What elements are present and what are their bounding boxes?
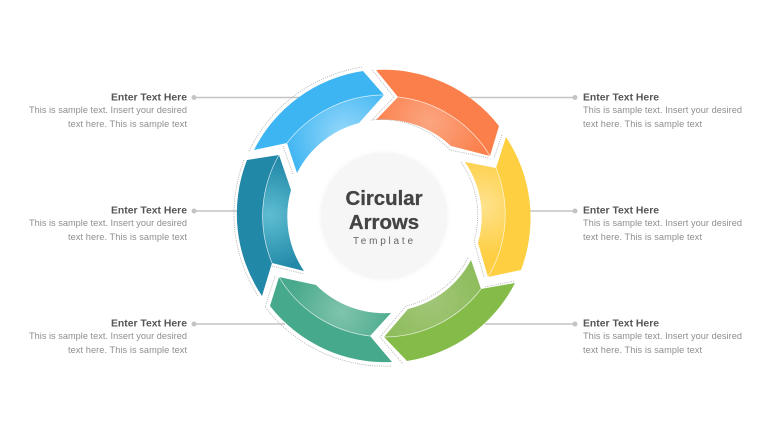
text block: top right: [583, 92, 742, 129]
center circle: [321, 153, 447, 279]
title: Circular: [345, 188, 423, 210]
arrow: green: [380, 258, 515, 364]
text block: middle right: This is sample text. Insert your desired: [583, 218, 742, 228]
text block: bottom right: text here. This is sample text: [583, 345, 702, 355]
connector lines: [192, 95, 578, 326]
arrow: teal green: [265, 276, 392, 366]
text block: middle left: Enter Text Here: [111, 206, 187, 216]
text block: top left: Enter Text Here: [111, 92, 187, 104]
center circle: Arrows: [349, 212, 419, 234]
arrow: dark teal: [234, 155, 304, 296]
text block: top left: [29, 92, 187, 129]
text block: bottom left: Enter Text Here: [111, 318, 187, 330]
text block: bottom left: text here. This is sample text: [68, 345, 187, 355]
text block: bottom left: [29, 318, 187, 355]
text block: middle right: Enter Text Here: [583, 206, 659, 216]
text block: bottom left: This is sample text. Insert your desired: [29, 331, 187, 341]
text block: top right: Enter Text Here: [583, 92, 659, 104]
text block: middle right: [583, 206, 742, 242]
text block: top right: text here. This is sample text: [583, 119, 702, 129]
text block: bottom right: Enter Text Here: [583, 318, 659, 330]
text block: top left: text here. This is sample text: [68, 119, 187, 129]
text block: middle left: [29, 206, 187, 242]
arrow: yellow: [461, 135, 531, 277]
arrow: orange: [372, 70, 499, 158]
text block: middle left: This is sample text. Insert your desired: [29, 218, 187, 228]
text block: bottom right: This is sample text. Insert your desired: [583, 331, 742, 341]
text block: top left: This is sample text. Insert your desired: [29, 105, 187, 115]
arrow: blue: [249, 67, 384, 174]
text block: bottom right: [583, 318, 742, 355]
text block: top right: This is sample text. Insert your desired: [583, 105, 742, 115]
center circle: Template: [353, 236, 413, 247]
text block: middle right: text here. This is sample text: [583, 232, 702, 242]
text block: middle left: text here. This is sample text: [68, 232, 187, 242]
